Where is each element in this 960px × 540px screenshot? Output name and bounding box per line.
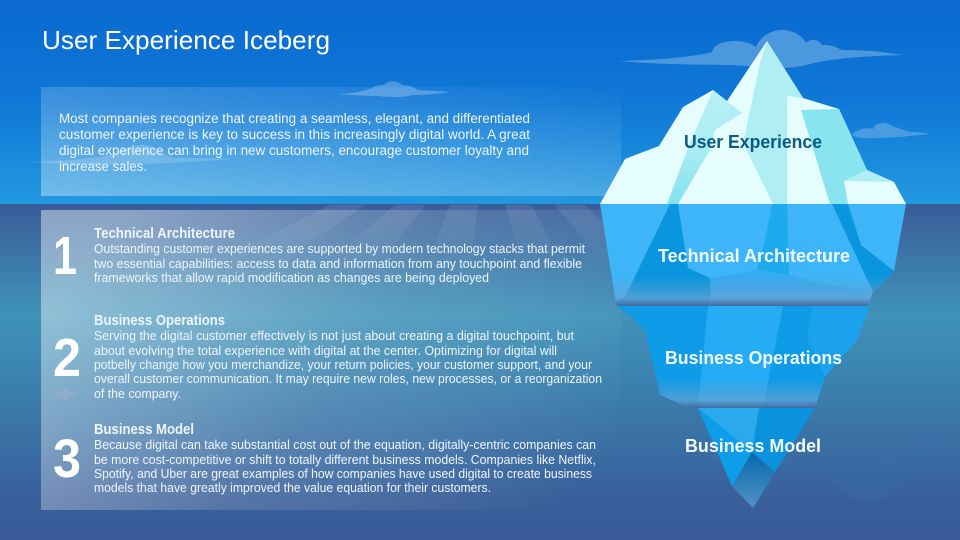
item 2: business operations: 2 [53, 328, 81, 388]
item 3: business model: Because digital can take substantial cost out of the equation, digitally-centric companies can [94, 438, 596, 452]
iceberg layer: business operations: Business Operations [665, 348, 842, 368]
item 3: business model: be more cost-competitive or shift to totally different business models. Companies like Netflix, [94, 453, 596, 467]
item 3: business model: 3 [53, 429, 81, 489]
panel: intro [41, 87, 621, 196]
item 1: technical architecture: 1 [53, 226, 77, 286]
item 3: business model: models that have greatly improved the value equation for their customers. [94, 481, 491, 495]
item 2: business operations: of the company. [94, 387, 181, 401]
item 1: technical architecture: two essential capabilities: access to data and information from any touchpoint and flexible [94, 257, 582, 271]
iceberg layer: business model [685, 408, 821, 508]
whale silhouette [825, 423, 948, 502]
item 2: business operations: Serving the digital customer effectively is not just about creating a digital touchpoint, but [94, 329, 575, 343]
item 3: business model: Business Model [94, 422, 194, 438]
item 2: business operations: overall customer communication. It may require new roles, new processes, or a reorganization [94, 372, 602, 386]
iceberg layer: technical architecture: Technical Architecture [658, 246, 850, 266]
iceberg layer: business operations [617, 306, 870, 408]
cloud: top behind iceberg [619, 30, 902, 68]
iceberg layer: technical architecture [600, 204, 910, 306]
intro text: Most companies recognize that creating a seamless, elegant, and differentiated [59, 111, 530, 126]
item 1: technical architecture: Technical Architecture [94, 226, 235, 242]
iceberg [600, 41, 910, 508]
item 3: business model [53, 422, 596, 495]
item 2: business operations: Business Operations [94, 313, 225, 329]
background: sea [0, 204, 960, 540]
item 2: business operations [53, 313, 602, 401]
title: User Experience Iceberg [42, 25, 330, 55]
background: sky [0, 0, 960, 205]
intro text: increase sales. [59, 159, 147, 174]
item 2: business operations: about evolving the total experience with digital at the center. Optimizing for digital will [94, 344, 557, 358]
sun rays [200, 205, 650, 270]
cloud: small centre [336, 81, 449, 97]
fish silhouette [55, 388, 76, 401]
panel: layers list [41, 210, 621, 510]
item 3: business model: Spotify, and Uber are great examples of how companies have used digital to create business [94, 467, 592, 481]
item 2: business operations: potbelly change how you merchandize, your return policies, your customer support, and your [94, 358, 592, 372]
item 1: technical architecture: Outstanding customer experiences are supported by modern technology stacks that permit [94, 242, 586, 256]
cloud: right [852, 123, 930, 138]
intro text [59, 111, 530, 174]
iceberg layer: user experience [600, 41, 906, 204]
intro text: digital experience can bring in new customers, encourage customer loyalty and [59, 143, 529, 158]
item 1: technical architecture [53, 226, 586, 286]
intro text: customer experience is key to success in this increasingly digital world. A great [59, 127, 530, 142]
iceberg layer: business model: Business Model [685, 436, 821, 456]
item 1: technical architecture: frameworks that allow rapid modification as changes are being deployed [94, 271, 489, 285]
iceberg layer: user experience: User Experience [684, 132, 822, 152]
cloud: left in panel [30, 145, 232, 165]
